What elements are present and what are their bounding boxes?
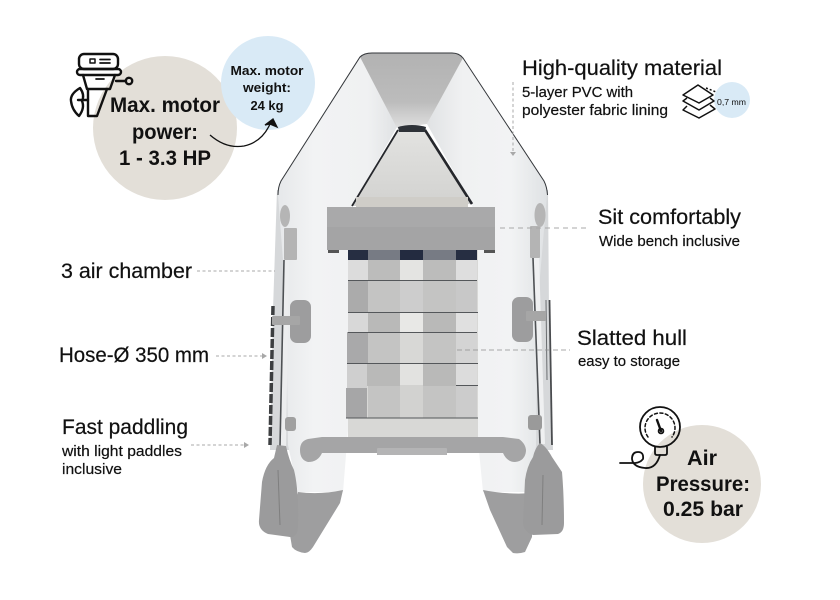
- boat: right tube: [427, 58, 547, 492]
- text: 3 air chamber: 3 air chamber: [61, 260, 192, 283]
- circle: material thickness background: [714, 82, 750, 118]
- text: max motor weight: 24 kg: [250, 98, 284, 113]
- text: max motor power: Max. motor: [110, 94, 220, 117]
- text: max motor weight: Max. motor: [230, 63, 304, 78]
- text: max motor power: [110, 94, 220, 170]
- boat: right deck edge: [425, 130, 472, 204]
- text: slatted hull: [577, 327, 687, 370]
- boat: left side silver strip: [270, 190, 292, 450]
- right oar: [523, 203, 564, 535]
- left oar: [259, 205, 298, 537]
- text: fast paddling: inclusive: [62, 462, 122, 478]
- boat: bow dark joint: [398, 125, 426, 132]
- text: max motor power: power:: [132, 121, 198, 144]
- text: sit comfortably: Wide bench inclusive: [599, 234, 740, 250]
- boat: right grey cone: [483, 490, 533, 553]
- arrow: power to weight: [210, 119, 277, 147]
- text: max motor weight: [230, 63, 304, 113]
- text: max motor weight: weight:: [242, 80, 291, 95]
- text: sit comfortably: [598, 206, 742, 250]
- boat: left grey cone: [290, 490, 343, 553]
- circle: motor weight background: [221, 36, 315, 130]
- leader: 3 air chamber: [197, 270, 275, 272]
- boat: left deck edge: [352, 130, 398, 206]
- right lower handle: [528, 415, 542, 430]
- boat: shoulder outline: [278, 53, 548, 195]
- boat illustration: [259, 53, 564, 553]
- left oarlock bracket: [272, 316, 300, 325]
- arrow: material leader: [510, 82, 516, 156]
- right oarlock: [512, 297, 533, 342]
- text: high-quality material: 5-layer PVC with: [522, 85, 633, 101]
- boat: grey bow: [360, 53, 463, 128]
- text: high-quality material: polyester fabric lining: [522, 103, 668, 119]
- icon: material layers: [683, 85, 716, 118]
- left lower handle: [285, 417, 296, 431]
- right oarlock bracket: [526, 311, 546, 321]
- boat: inner deck triangle: [352, 131, 472, 206]
- icon: outboard motor: [71, 54, 132, 116]
- leader: sit comfortably: [500, 227, 590, 229]
- left oarlock: [290, 300, 311, 343]
- arrow: fast paddling: [191, 442, 249, 448]
- leader: slatted hull: [457, 349, 570, 351]
- text: high-quality material: [522, 57, 722, 119]
- circle: air pressure background: [643, 425, 761, 543]
- boat: transom board: [300, 437, 526, 462]
- arrow: hose diameter: [216, 353, 267, 359]
- text: air pressure: [656, 447, 750, 521]
- text: air pressure: Pressure:: [656, 473, 750, 496]
- text: air pressure: 0.25 bar: [663, 498, 743, 521]
- circle: motor power background: [93, 56, 237, 200]
- boat: deck band: [356, 197, 468, 207]
- text: fast paddling: with light paddles: [61, 444, 182, 460]
- text: sit comfortably: Sit comfortably: [598, 206, 742, 229]
- boat: left tube: [278, 57, 397, 492]
- text: hose diameter: Hose-Ø 350 mm: [59, 344, 209, 367]
- text: slatted hull: Slatted hull: [577, 327, 687, 350]
- text: air pressure: Air: [687, 447, 717, 470]
- text: thickness: 0,7 mm: [717, 97, 746, 107]
- boat: right side silver strip: [532, 190, 553, 450]
- boat: bench seat: [327, 207, 495, 253]
- text: slatted hull: easy to storage: [578, 354, 680, 370]
- text: fast paddling: [61, 416, 188, 478]
- boat: floor: [346, 250, 478, 437]
- text: fast paddling: Fast paddling: [62, 416, 188, 439]
- icon: pressure gauge: [620, 407, 680, 468]
- text: max motor power: 1 - 3.3 HP: [119, 147, 211, 170]
- text: high-quality material: High-quality material: [522, 57, 722, 80]
